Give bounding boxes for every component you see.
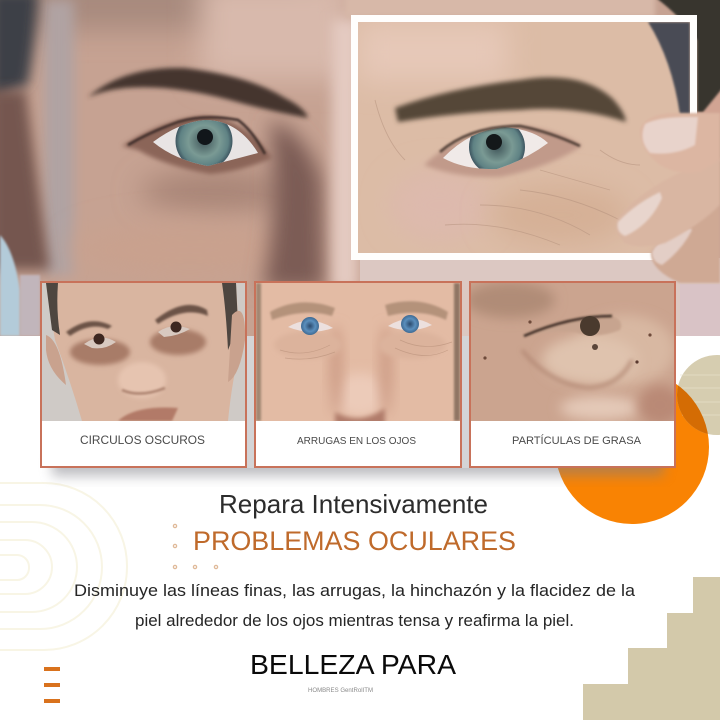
wrinkle lines (375, 100, 640, 245)
label: PARTÍCULAS DE GRASA (512, 434, 642, 447)
card: oily particles (465, 282, 682, 467)
decoration: beige striped circle (677, 355, 720, 435)
finger: index (640, 113, 720, 173)
finger: ring (651, 205, 720, 283)
small caption: HOMBRES GentRolITM (308, 687, 373, 694)
subheading: problemas oculares: PROBLEMAS OCULARES (193, 526, 516, 556)
right skin and hair (704, 92, 720, 112)
decoration: concentric cream outlines (0, 483, 127, 650)
photo: young man with dark circles (42, 283, 245, 421)
shadow beneath the three cards (52, 454, 664, 476)
aged eyebrow (395, 77, 626, 122)
label: CIRCULOS OSCUROS (80, 433, 205, 447)
description paragraph: piel alrededor de los ojos mientras tensa y reafirma la piel. (135, 611, 574, 630)
hero eyebrow (88, 68, 308, 118)
tagline: belleza para: BELLEZA PARA (250, 649, 456, 680)
gaps between cards (247, 336, 469, 468)
photo: older man with blue eyes (256, 283, 460, 425)
hero eye (122, 112, 272, 174)
decoration: beige staircase (583, 577, 720, 720)
description paragraph (74, 581, 636, 630)
description paragraph: Disminuye las líneas finas, las arrugas, la hinchazón y la flacidez de la (74, 581, 636, 600)
photo card: aged eye held in white frame (351, 15, 697, 260)
hero photo: man's face close-up (0, 0, 720, 336)
finger: middle (616, 158, 720, 246)
card: eye wrinkles (255, 282, 461, 467)
left hair (0, 0, 38, 100)
photo: close-up of mature skin (465, 282, 682, 425)
aged eye (424, 119, 582, 177)
heading: repara intensivamente: Repara Intensivamente (219, 489, 488, 519)
fingers holding the photo (616, 113, 720, 283)
label: ARRUGAS EN LOS OJOS (297, 435, 416, 447)
dotted corner ornament (173, 524, 218, 569)
decoration: orange circle (555, 370, 709, 524)
nose shadow and ridge (262, 120, 325, 290)
card: dark circles (41, 282, 246, 467)
three orange dashes (44, 667, 60, 703)
